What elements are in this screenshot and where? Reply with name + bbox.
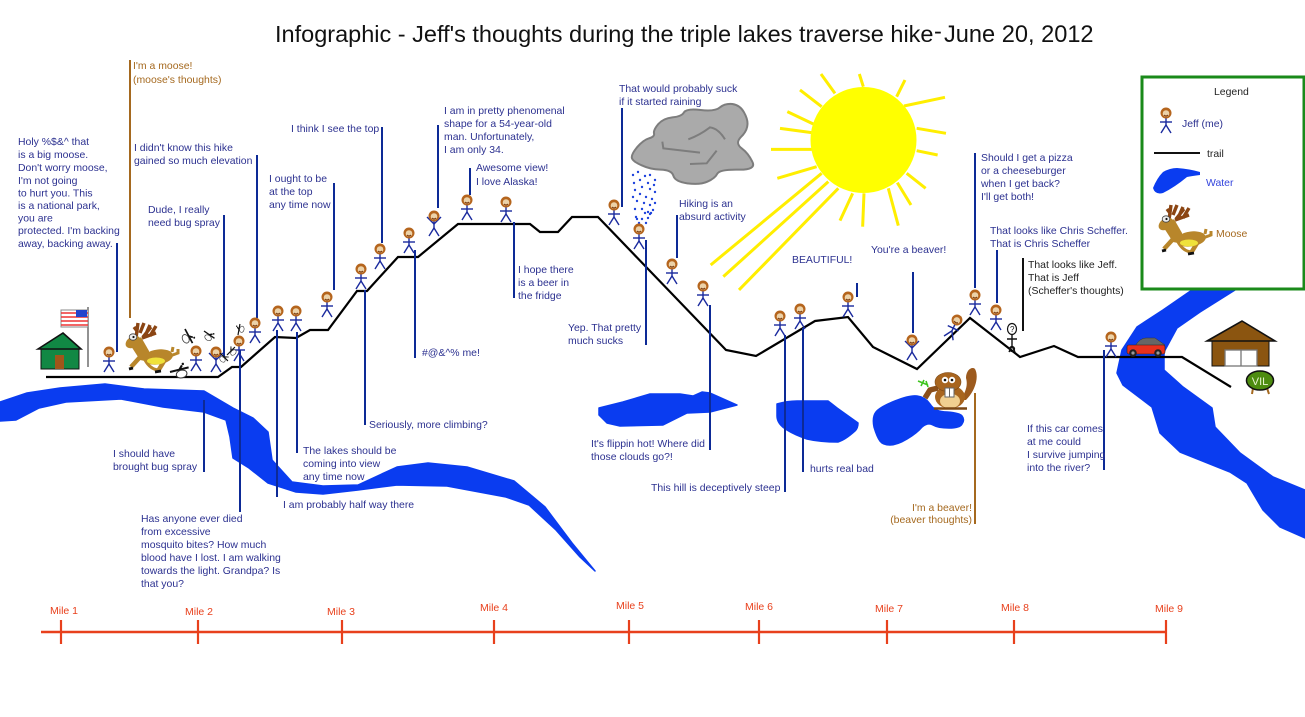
note: ought to be at top: any time now — [269, 200, 331, 211]
note: brought bug spray: brought bug spray — [113, 462, 198, 473]
note: flippin hot: It's flippin hot! Where did — [591, 439, 705, 450]
note: beautiful: BEAUTIFUL! — [792, 255, 852, 266]
house — [38, 333, 81, 369]
note: car river: into the river? — [1027, 463, 1090, 474]
note: backing away: I'm not going — [18, 176, 78, 187]
note: absurd activity: Hiking is an — [679, 199, 733, 210]
note: you're a beaver: You're a beaver! — [871, 245, 946, 256]
note: mosquito bites: mosquito bites? How much — [141, 540, 267, 551]
legend — [1142, 77, 1304, 289]
cloud — [632, 104, 753, 184]
rain — [632, 171, 656, 224]
note: backing away: Don't worry moose, — [18, 163, 108, 174]
title: Infographic - Jeff's thoughts during the triple lakes traverse hike — [275, 21, 934, 47]
note: lakes: coming into view — [303, 459, 381, 470]
note: elevation: gained so much elevation — [134, 156, 253, 167]
note: Chris Scheffer: That is Chris Scheffer — [990, 239, 1091, 250]
note: backing away: Holy %$&^ that — [18, 137, 89, 148]
note: see the top: I think I see the top — [291, 124, 379, 135]
note: moose thoughts: I'm a moose! — [133, 61, 192, 72]
note: curse: #@&^% me! — [422, 348, 480, 359]
note: backing away: away, backing away. — [18, 239, 113, 250]
lake 1 — [599, 392, 737, 426]
legend: Jeff (me) — [1182, 119, 1223, 130]
Scheffer figure: ? — [1010, 325, 1015, 334]
legend: trail — [1207, 149, 1224, 160]
note: lakes: The lakes should be — [303, 446, 396, 457]
note: pizza: or a cheeseburger — [981, 166, 1066, 177]
moose on trail — [123, 323, 178, 372]
note: beer: is a beer in — [518, 278, 569, 289]
trail — [46, 217, 1231, 387]
car — [1127, 338, 1165, 357]
mile scale: Mile 8 — [1001, 602, 1029, 614]
note: backing away: to hurt you. This — [18, 188, 93, 200]
mile scale: Mile 9 — [1155, 603, 1183, 615]
sun — [711, 74, 946, 290]
note: awesome view: Awesome view! — [476, 163, 548, 174]
note: backing away: you are — [18, 214, 53, 224]
note: moose thoughts: (moose's thoughts) — [133, 75, 221, 86]
mile scale: Mile 1 — [50, 605, 78, 617]
mile scale: Mile 4 — [480, 602, 508, 614]
note: mosquito bites: from excessive — [141, 527, 211, 538]
mile scale — [41, 600, 1183, 644]
note: half way: I am probably half way there — [283, 500, 414, 511]
mile scale: Mile 2 — [185, 606, 213, 618]
note: ought to be at top: I ought to be — [269, 174, 327, 185]
legend: Water — [1206, 178, 1234, 189]
note: bug spray: need bug spray — [148, 218, 221, 229]
note: car river: If this car comes — [1027, 424, 1103, 435]
mile scale: Mile 3 — [327, 606, 355, 618]
lake 3 — [873, 396, 964, 445]
note: ought to be at top: at the top — [269, 187, 313, 198]
note: lakes: any time now — [303, 472, 365, 483]
Scheffer figure — [1007, 324, 1017, 352]
title — [275, 18, 1094, 48]
note: awesome view: I love Alaska! — [476, 177, 538, 188]
river left — [0, 384, 595, 571]
flag — [61, 307, 88, 367]
note: mosquito bites: Has anyone ever died — [141, 514, 243, 525]
note: bug spray: Dude, I really — [148, 205, 210, 216]
note: Scheffer's thoughts: That looks like Jeff. — [1028, 260, 1117, 271]
VIL sign — [1246, 371, 1274, 394]
garage — [1207, 321, 1275, 366]
note: Scheffer's thoughts: (Scheffer's thoughts) — [1028, 286, 1124, 297]
note: flippin hot: those clouds go?! — [591, 452, 673, 463]
mile scale: Mile 7 — [875, 603, 903, 615]
note: car river: I survive jumping — [1027, 450, 1106, 461]
note: beaver thoughts: (beaver thoughts) — [890, 515, 972, 526]
VIL sign: VIL — [1252, 376, 1268, 388]
note: hurts: hurts real bad — [810, 464, 874, 475]
note: deceptively steep: This hill is deceptively steep — [651, 483, 781, 494]
note: Scheffer's thoughts: That is Jeff — [1028, 273, 1079, 284]
note: mosquito bites: blood have I lost. I am walking — [141, 553, 281, 564]
note: phenomenal shape: I am only 34. — [444, 145, 504, 156]
title: - — [934, 18, 942, 44]
river right — [1117, 290, 1305, 538]
note: phenomenal shape: I am in pretty phenomenal — [444, 106, 565, 117]
note: backing away: is a big moose. — [18, 150, 88, 161]
note: mosquito bites: that you? — [141, 579, 184, 590]
mile scale: Mile 5 — [616, 600, 644, 612]
note: more climbing: Seriously, more climbing? — [369, 420, 488, 431]
note: phenomenal shape: man. Unfortunately, — [444, 132, 534, 143]
note: pizza: when I get back? — [980, 179, 1060, 190]
note: pretty much sucks: Yep. That pretty — [568, 323, 641, 334]
title: June 20, 2012 — [944, 22, 1094, 48]
note: pretty much sucks: much sucks — [568, 336, 623, 347]
lake 2 — [777, 401, 858, 442]
note: elevation: I didn't know this hike — [134, 143, 233, 154]
note: pizza: Should I get a pizza — [981, 153, 1073, 164]
note: brought bug spray: I should have — [113, 449, 175, 460]
note: pizza: I'll get both! — [981, 192, 1034, 203]
note: mosquito bites: towards the light. Grandpa? Is — [141, 566, 280, 577]
mile scale: Mile 6 — [745, 601, 773, 613]
mosquitoes — [169, 323, 245, 380]
note: car river: at me could — [1027, 437, 1081, 448]
legend: Moose — [1216, 229, 1248, 240]
note: raining: That would probably suck — [619, 84, 737, 95]
legend: Legend — [1214, 87, 1249, 98]
note: beer: I hope there — [518, 265, 574, 276]
note: beaver thoughts: I'm a beaver! — [912, 503, 972, 514]
note: beer: the fridge — [518, 291, 562, 302]
note: absurd activity: absurd activity — [679, 212, 746, 223]
note: raining: if it started raining — [619, 97, 702, 108]
beaver — [918, 368, 977, 408]
note: backing away: is a national park, — [18, 201, 100, 212]
thought lines — [117, 60, 1104, 524]
note: Chris Scheffer: That looks like Chris Scheffer. — [990, 226, 1128, 237]
note: phenomenal shape: shape for a 54-year-old — [444, 119, 552, 130]
note: backing away: protected. I'm backing — [18, 226, 120, 237]
Jeff figures — [103, 194, 1117, 372]
